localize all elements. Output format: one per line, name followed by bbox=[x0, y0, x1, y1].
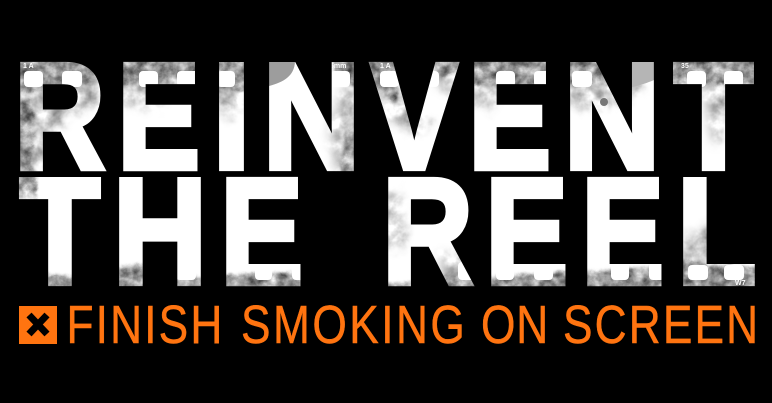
title line 2: THE REEL: R bbox=[382, 148, 473, 316]
film perforations top row bbox=[24, 71, 743, 87]
film edge markings: 5mm bbox=[330, 63, 346, 70]
title line 2: THE REEL: E bbox=[581, 148, 664, 316]
tagline bbox=[66, 295, 758, 355]
title line 2: THE REEL: E bbox=[485, 148, 568, 316]
film edge markings: 1 A bbox=[23, 63, 34, 70]
title line 1: REINVENT: E bbox=[468, 33, 551, 201]
film edge markings bbox=[23, 63, 746, 287]
title line 1: REINVENT bbox=[14, 32, 753, 201]
darker film strip bands at the letter edges bbox=[14, 55, 760, 296]
tagline: SCREEN bbox=[563, 295, 758, 355]
soft haze fading down the letters bbox=[10, 70, 730, 296]
film edge markings: 35 bbox=[681, 63, 689, 70]
title line 1: REINVENT: V bbox=[371, 32, 457, 201]
film edge markings: W7 bbox=[735, 280, 746, 287]
film edge markings: 1 A bbox=[380, 63, 391, 70]
title line 1: REINVENT: N bbox=[262, 33, 361, 201]
icon: orange box with black cross bbox=[19, 306, 57, 344]
tagline: FINISH bbox=[66, 295, 222, 355]
title line 1: REINVENT: I bbox=[212, 32, 251, 201]
film scratch dome marks bbox=[269, 62, 295, 86]
title line 2: THE REEL: T bbox=[20, 148, 100, 317]
title line 1: REINVENT: E bbox=[117, 33, 200, 201]
title line 1: REINVENT: T bbox=[674, 32, 753, 201]
film perforations bottom row bbox=[176, 262, 744, 280]
title line 2: THE REEL: L bbox=[677, 147, 757, 316]
title line 2: THE REEL: E bbox=[220, 148, 303, 316]
title line 2: THE REEL bbox=[20, 147, 757, 317]
title line 2: THE REEL: H bbox=[113, 147, 207, 316]
title line 1: REINVENT: R bbox=[14, 33, 105, 201]
tagline: SMOKING bbox=[241, 295, 465, 355]
tagline: ON bbox=[481, 295, 548, 355]
title line 1: REINVENT: N bbox=[564, 33, 661, 201]
film strip texture over the title letters bbox=[10, 55, 760, 296]
